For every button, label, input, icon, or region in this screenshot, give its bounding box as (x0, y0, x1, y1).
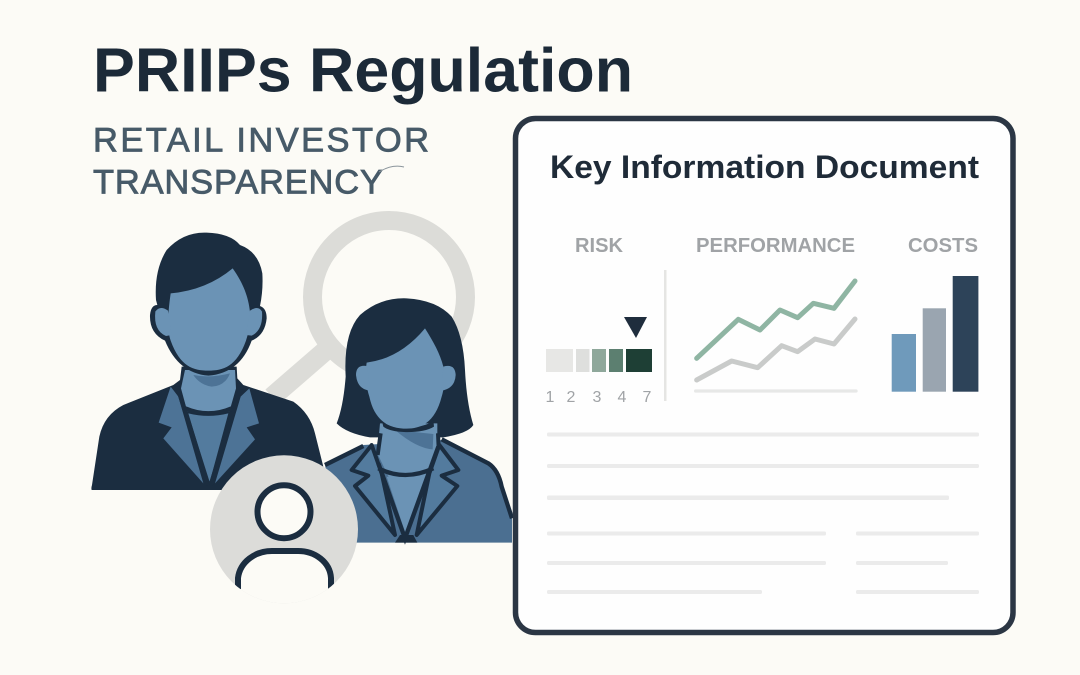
title: PRIIPs Regulation (93, 36, 633, 106)
section labels (575, 235, 978, 257)
risk numbers: 1 (546, 389, 555, 406)
figure: male investor (91, 233, 323, 490)
section labels: RISK (575, 235, 624, 257)
section labels: PERFORMANCE (696, 235, 855, 257)
risk numbers: 7 (643, 389, 652, 406)
infographic canvas (91, 46, 1016, 636)
subtitle (93, 122, 429, 202)
chart: performance lines (696, 281, 856, 391)
risk numbers: 4 (618, 389, 627, 406)
risk numbers: 3 (593, 389, 602, 406)
subtitle: RETAIL INVESTOR (93, 122, 429, 160)
chart: costs bars (892, 276, 978, 392)
icon: magnifying glass (272, 220, 466, 397)
risk numbers: 2 (567, 389, 576, 406)
risk numbers (546, 389, 652, 406)
risk marker (624, 317, 647, 338)
panel heading: Key Information Document (550, 149, 979, 185)
text placeholder lines (547, 432, 979, 594)
section labels: COSTS (908, 235, 978, 257)
panel: key information document (516, 118, 1013, 632)
chart: risk scale (546, 317, 652, 406)
subtitle: TRANSPARENCY (93, 164, 383, 202)
figure: female investor (325, 298, 512, 543)
icon: user badge (210, 455, 358, 589)
